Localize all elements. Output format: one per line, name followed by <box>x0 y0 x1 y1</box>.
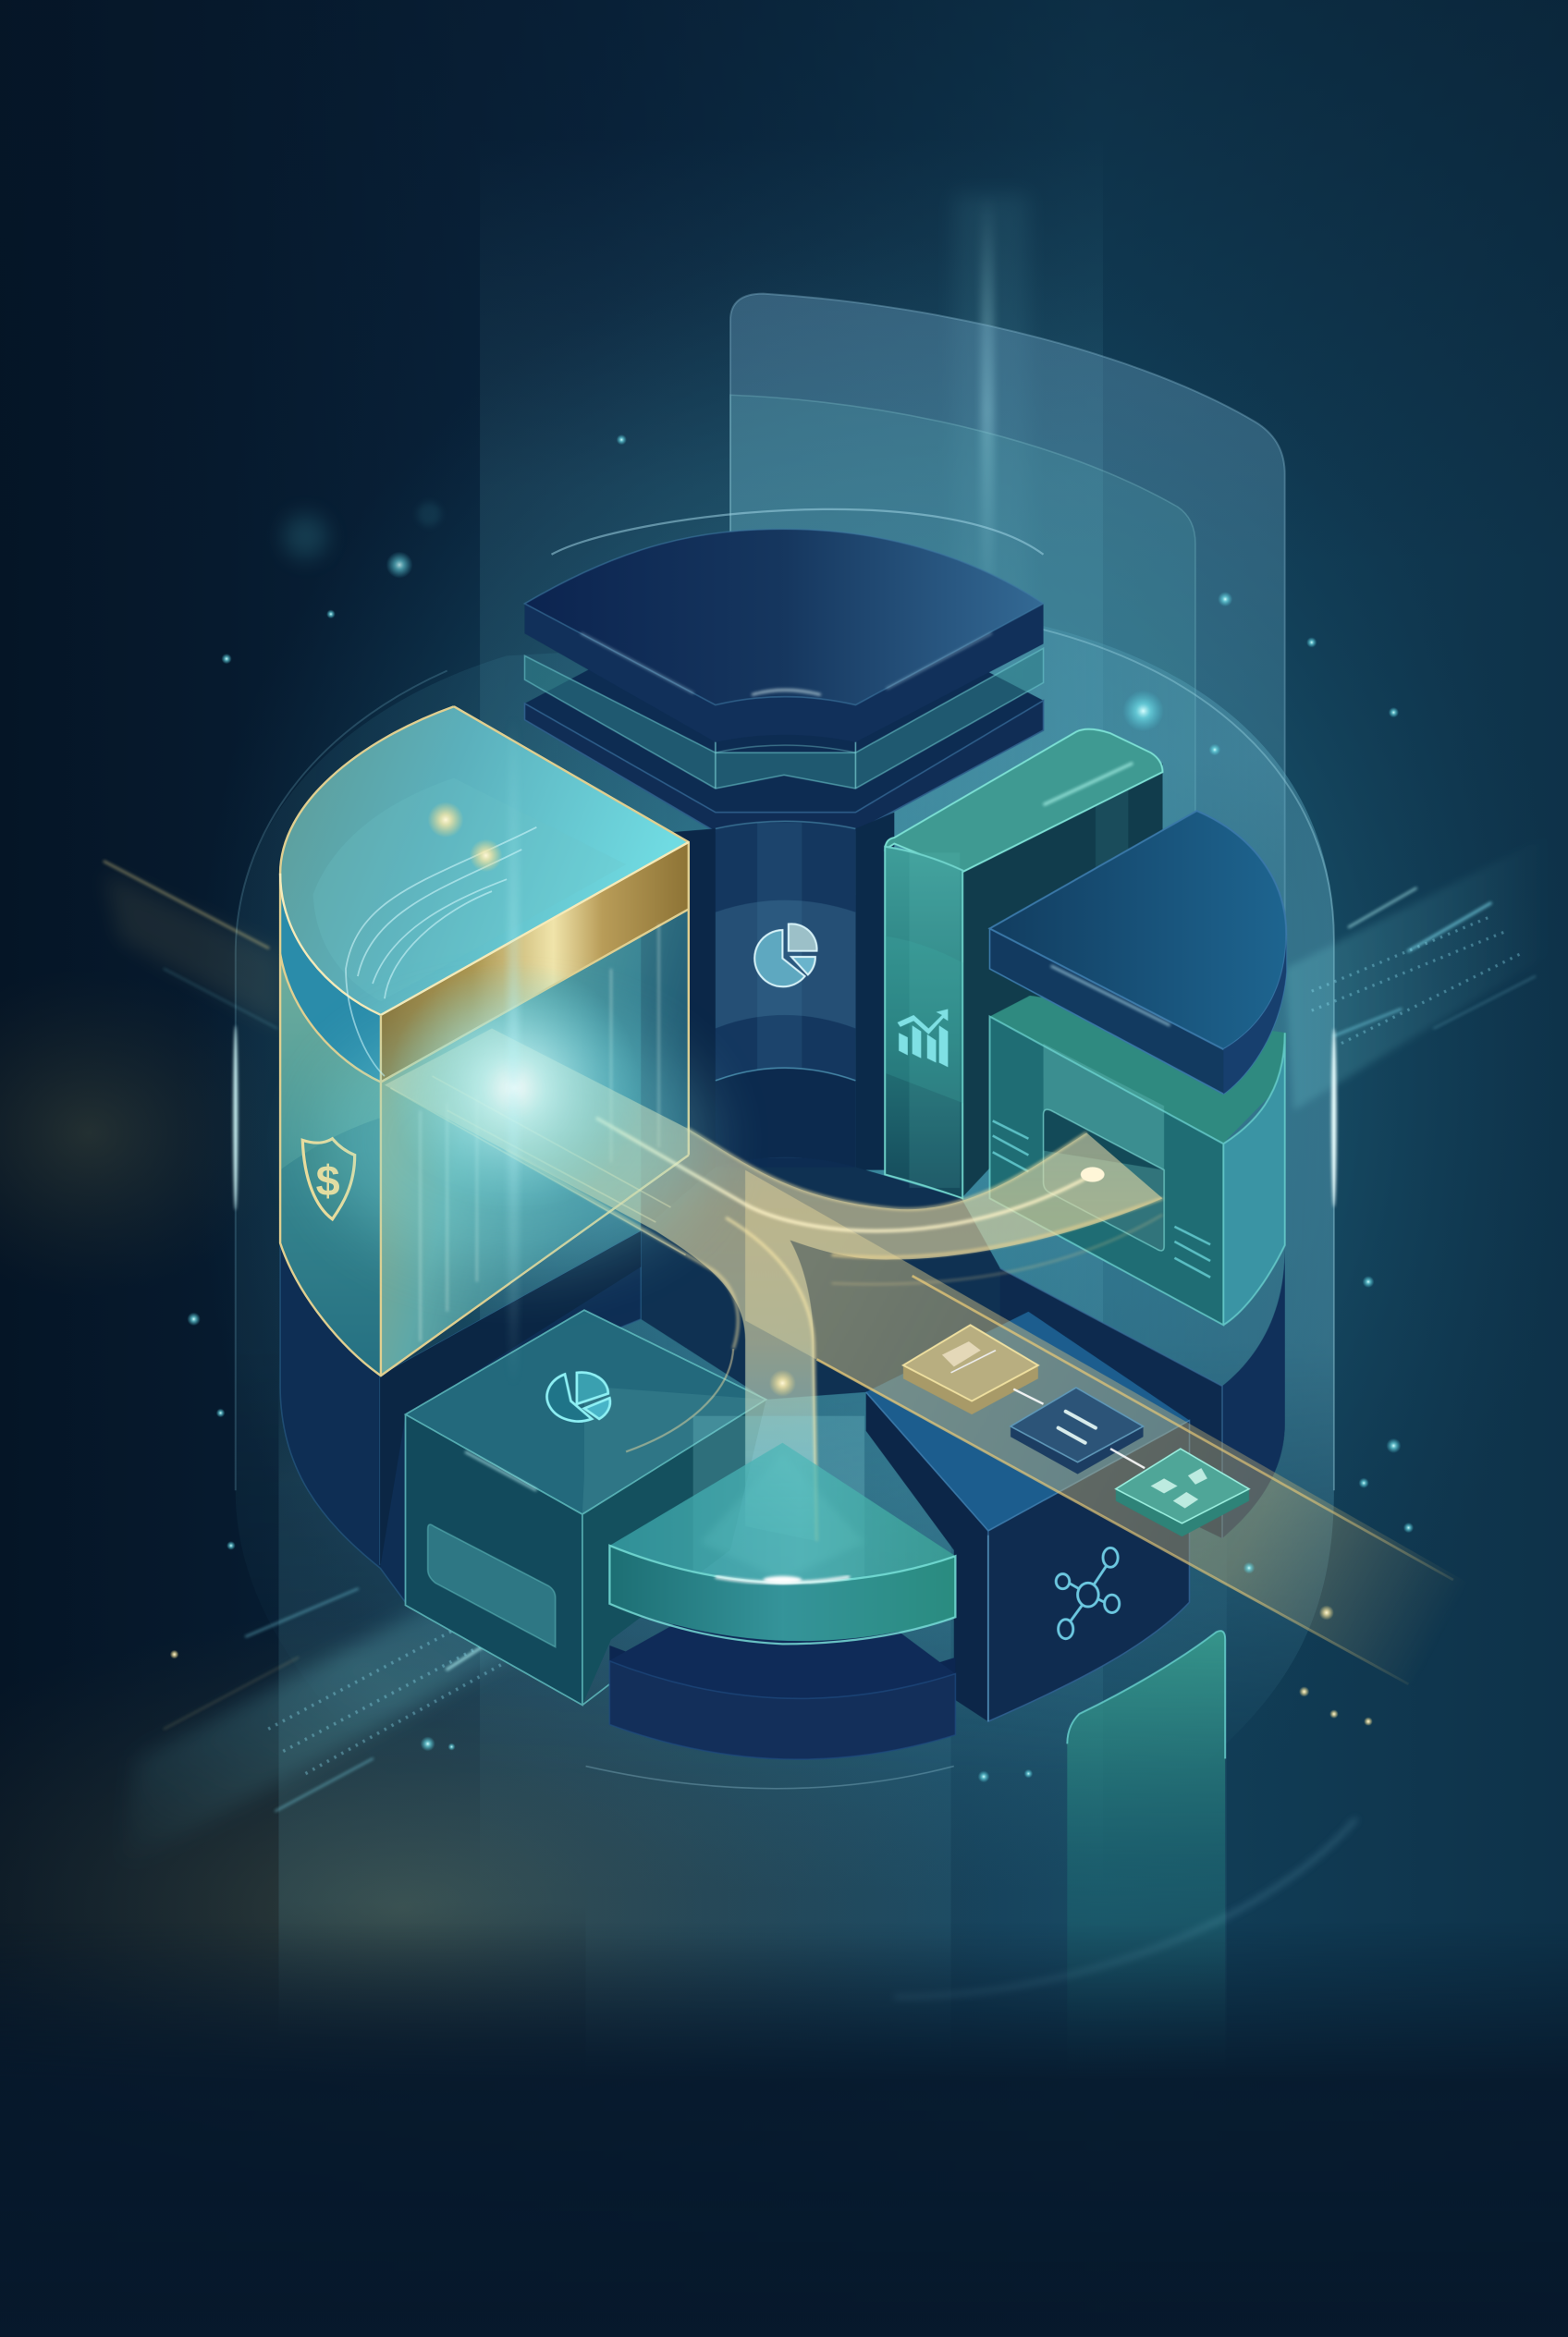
icon: growth chart <box>898 1009 948 1067</box>
top surface <box>280 706 689 1015</box>
outlines <box>280 706 689 1376</box>
chip: navy card <box>1011 1388 1144 1474</box>
icon: shield with dollar: $ <box>316 1156 340 1205</box>
swirl lines <box>346 827 536 1076</box>
left lower cylinder base <box>280 1231 641 1602</box>
floating particles <box>170 434 1414 1782</box>
central column with pie icon <box>716 821 855 1167</box>
lower glow arc <box>894 1818 1356 1997</box>
central teal fan base <box>586 1443 955 1789</box>
right green block with window <box>989 996 1286 1325</box>
blue fan top of right block <box>989 811 1286 1094</box>
translucent middle layer <box>524 648 1044 789</box>
lower right dark cylinder <box>1000 1249 1285 1538</box>
stem light column <box>693 1416 864 1602</box>
top fan slab stack <box>524 529 1044 789</box>
outer glass cylinder shell <box>236 509 1334 1774</box>
lower right green panel <box>1067 1631 1225 2086</box>
light streak bands <box>104 835 1550 1870</box>
road tip node <box>1081 1167 1105 1182</box>
icon: network nodes <box>1056 1548 1120 1639</box>
blue band <box>280 874 381 1082</box>
vertical light beams <box>278 134 1227 2086</box>
connector two <box>1110 1449 1145 1468</box>
green cube with pie icon <box>406 1310 766 1705</box>
central dark core <box>524 567 1044 1237</box>
icon: column pie chart <box>754 924 817 986</box>
right dark block with network icon <box>866 1312 1190 1721</box>
front face <box>381 909 689 1376</box>
green data panel with chart icon <box>885 729 1162 1198</box>
left curved face <box>280 874 381 1376</box>
central floor beneath road <box>641 1167 1000 1431</box>
bright source glow <box>321 1013 708 1266</box>
shell edge glints <box>233 1025 1337 1210</box>
fan thickness <box>524 604 1044 742</box>
icon: shield with dollar <box>302 1139 355 1219</box>
icon: cube pie chart <box>547 1373 610 1421</box>
gold conveyor belt <box>745 1170 1468 1687</box>
interior light rails <box>421 924 659 1341</box>
chip: gold card <box>903 1325 1038 1414</box>
connector one <box>1013 1389 1044 1404</box>
gold band <box>381 842 689 1082</box>
chip: teal card <box>1116 1449 1249 1536</box>
window opening <box>1044 1109 1164 1251</box>
slit in cube <box>428 1524 556 1647</box>
fan top surface <box>524 529 1044 705</box>
bottom dark fade <box>0 1923 1568 2337</box>
gold glass block <box>280 706 689 1376</box>
golden data road <box>321 716 1162 1602</box>
translucent back panels <box>730 294 1285 954</box>
